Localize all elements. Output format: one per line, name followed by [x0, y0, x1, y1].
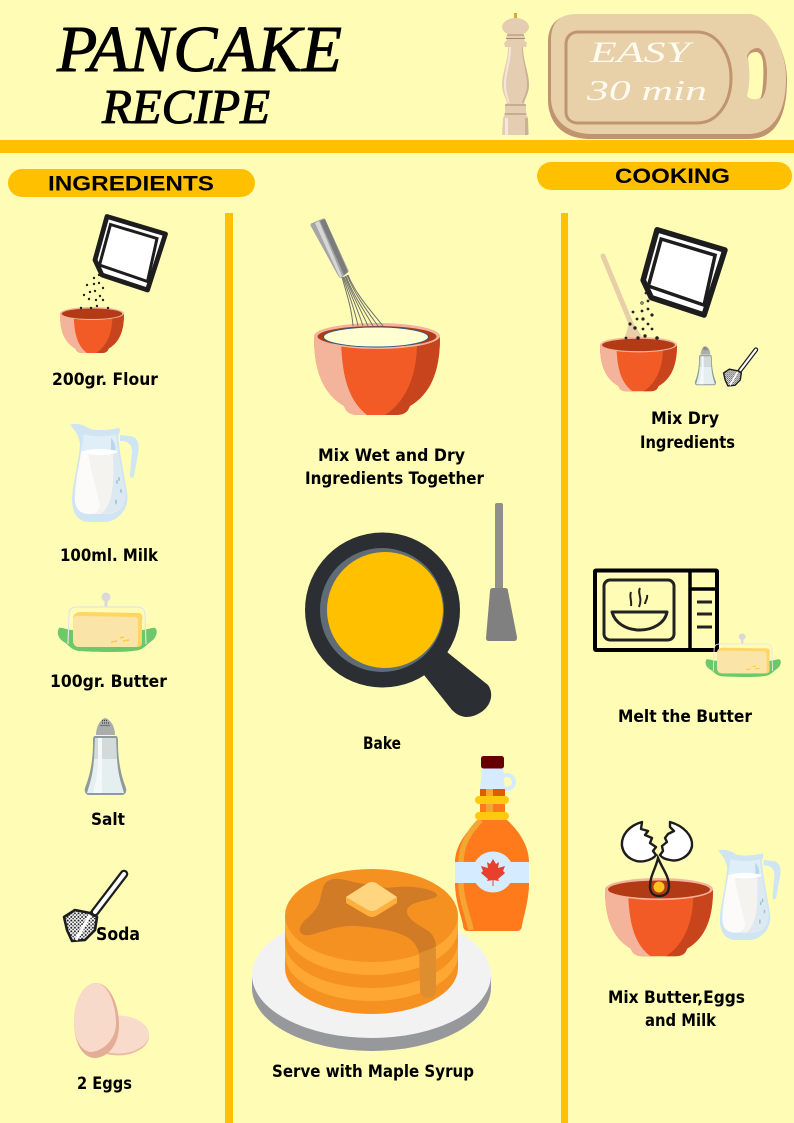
icon: bowl with whisk: [312, 219, 440, 415]
ingredient: flour: 200gr. Flour: [52, 370, 159, 389]
caption: mix wet and dry: Ingredients Together: [305, 469, 485, 488]
note: easy 30 min: [585, 36, 707, 107]
caption: mix dry ingredients: Mix Dry: [651, 409, 719, 428]
title: RECIPE: [101, 79, 270, 134]
ingredient: butter: [50, 592, 168, 691]
icon: microwave: [595, 570, 717, 650]
icon: flour packet: [643, 230, 725, 315]
heading: cooking: [537, 162, 792, 190]
ingredient: salt: [85, 718, 126, 829]
flour dots: [625, 292, 659, 340]
panel: cooking: [595, 230, 781, 1030]
icon: pepper mill: [502, 13, 529, 135]
icon: frying pan: [305, 532, 491, 717]
heading: cooking: COOKING: [615, 165, 730, 188]
step: melt the butter: Melt the Butter: [618, 707, 753, 726]
icon: soda spoon small: [724, 350, 756, 386]
ingredient: eggs: 2 Eggs: [77, 1074, 132, 1093]
caption: mix dry ingredients: Ingredients: [640, 433, 735, 452]
heading: ingredients: [8, 169, 255, 197]
step: bake: Bake: [363, 734, 401, 753]
icon: maple syrup bottle: [455, 756, 529, 931]
ingredient: soda: [64, 874, 140, 945]
icon: wooden spoon: [603, 256, 640, 338]
ingredient: flour: [52, 216, 166, 389]
caption: mix butter, eggs and milk: Mix Butter,Eggs: [608, 988, 745, 1007]
title: [56, 13, 342, 134]
icon: milk jug small: [718, 850, 781, 940]
ingredient: eggs: [74, 983, 149, 1093]
icon: mixing bowl: [600, 337, 677, 391]
ingredient: salt: Salt: [91, 810, 125, 829]
heading: ingredients: INGREDIENTS: [48, 172, 214, 196]
note: easy 30 min: EASY: [589, 36, 695, 69]
panel: mixing and serving steps: [252, 219, 529, 1081]
ingredient: milk: [60, 424, 159, 565]
step: bake: [305, 503, 517, 753]
panel: ingredients: [50, 216, 168, 1093]
column divider left: [225, 213, 233, 1123]
step: mix butter, eggs and milk: [605, 822, 781, 1030]
caption: mix butter, eggs and milk: and Milk: [645, 1011, 717, 1030]
icon: spatula: [486, 503, 517, 641]
ingredient: soda: Soda: [96, 924, 140, 945]
caption: mix dry ingredients: [640, 409, 735, 452]
ingredient: butter: 100gr. Butter: [50, 672, 168, 691]
icon: egg bowl: [605, 878, 713, 956]
note: easy 30 min: 30 min: [585, 76, 707, 107]
ingredient: milk: 100ml. Milk: [60, 546, 159, 565]
icon: cutting board with time note: [548, 14, 787, 139]
icon: pancake stack on plate: [252, 869, 491, 1051]
step: serve: [252, 756, 529, 1081]
caption: mix wet and dry: [305, 446, 485, 488]
step: mix wet and dry: [305, 219, 485, 488]
caption: mix butter, eggs and milk: [608, 988, 745, 1030]
title: PANCAKE: [56, 13, 342, 86]
column divider right: [561, 213, 568, 1123]
divider bar: [0, 140, 794, 153]
icon: cracked egg: [622, 822, 692, 896]
icon: salt shaker small: [695, 346, 716, 385]
icon: butter dish small: [706, 633, 781, 677]
step: melt the butter: [595, 570, 781, 726]
step: mix dry ingredients: [600, 230, 756, 452]
step: serve: Serve with Maple Syrup: [272, 1062, 474, 1081]
caption: mix wet and dry: Mix Wet and Dry: [318, 446, 465, 465]
